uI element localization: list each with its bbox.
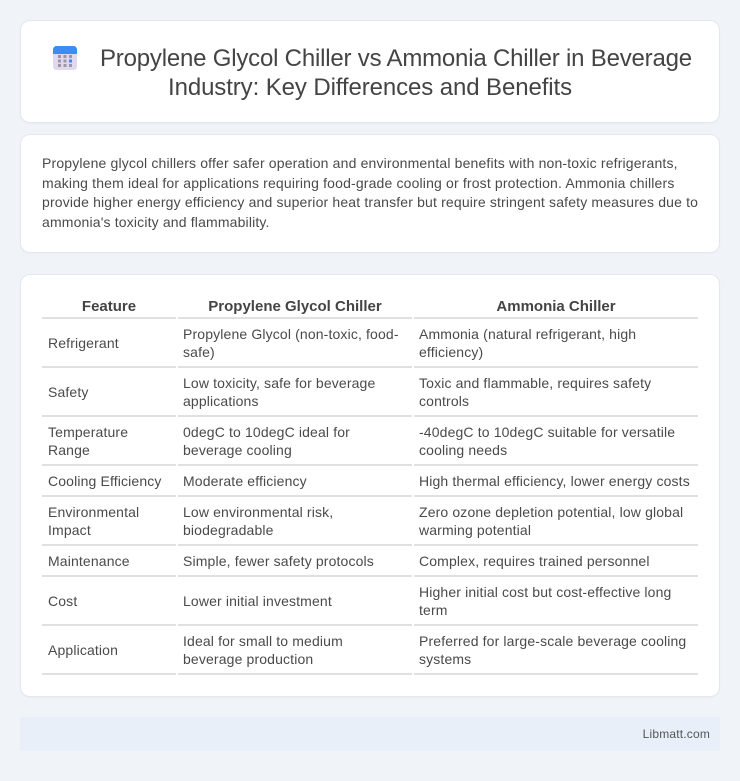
row: application: [42, 633, 698, 675]
table card: [20, 274, 720, 697]
row: refrigerant: efficiency): [419, 344, 483, 360]
row: safety: [42, 375, 698, 417]
intro text: provide higher energy efficiency and superior heat transfer but require stringent safety measures due to: [42, 194, 698, 210]
title: Industry: Key Differences and Benefits: [168, 74, 572, 101]
row: temperature range: Range: [48, 442, 90, 458]
row: maintenance: Simple, fewer safety protocols: [183, 553, 374, 569]
row: application: Application: [48, 642, 118, 658]
row: safety: Safety: [48, 384, 89, 400]
row: refrigerant: Ammonia (natural refrigerant, high: [419, 326, 636, 342]
row: application: Ideal for small to medium: [183, 633, 343, 649]
intro text: [42, 155, 698, 230]
row: cost: [42, 584, 698, 626]
intro text: ammonia's toxicity and flammability.: [42, 214, 270, 230]
row: cooling efficiency: [42, 473, 698, 497]
row: temperature range: beverage cooling: [183, 442, 292, 458]
row: maintenance: Complex, requires trained personnel: [419, 553, 650, 569]
footer bar: [20, 717, 720, 751]
row: safety: Low toxicity, safe for beverage: [183, 375, 375, 391]
row: environmental impact: Impact: [48, 522, 91, 538]
row: environmental impact: Environmental: [48, 504, 139, 520]
footer text: Libmatt.com: [643, 727, 710, 741]
row: cost: Cost: [48, 593, 77, 609]
table header: Ammonia Chiller: [496, 298, 616, 315]
table header: Propylene Glycol Chiller: [208, 298, 382, 315]
row: maintenance: Maintenance: [48, 553, 130, 569]
row: environmental impact: Zero ozone depletion potential, low global: [419, 504, 683, 520]
row: environmental impact: Low environmental risk,: [183, 504, 333, 520]
row: safety: Toxic and flammable, requires safety: [419, 375, 651, 391]
row: environmental impact: [42, 504, 698, 546]
row: safety: controls: [419, 393, 469, 409]
row: environmental impact: warming potential: [419, 522, 531, 538]
row: cost: term: [419, 602, 448, 618]
row: temperature range: Temperature: [48, 424, 128, 440]
title: [100, 45, 692, 101]
row: temperature range: 0degC to 10degC ideal for: [183, 424, 350, 440]
row: temperature range: [42, 424, 698, 466]
header card: [20, 20, 720, 123]
row: maintenance: [42, 553, 698, 577]
row: refrigerant: Refrigerant: [48, 335, 119, 351]
row: environmental impact: biodegradable: [183, 522, 274, 538]
intro text: Propylene glycol chillers offer safer operation and environmental benefits with non-toxic refrigerants,: [42, 155, 678, 171]
intro card: [20, 134, 720, 253]
title: Propylene Glycol Chiller vs Ammonia Chiller in Beverage: [100, 45, 692, 72]
row: cooling efficiency: Moderate efficiency: [183, 473, 307, 489]
table header: [42, 298, 698, 319]
table header: Feature: [82, 298, 136, 315]
row: application: beverage production: [183, 651, 313, 667]
row: cooling efficiency: Cooling Efficiency: [48, 473, 162, 489]
intro text: making them ideal for applications requiring food-grade cooling or frost protection. Ammonia chillers: [42, 174, 674, 190]
row: temperature range: -40degC to 10degC suitable for versatile: [419, 424, 675, 440]
row: application: Preferred for large-scale beverage cooling: [419, 633, 686, 649]
icon: calendar: [53, 46, 77, 70]
row: refrigerant: [42, 326, 698, 368]
row: safety: applications: [183, 393, 259, 409]
row: temperature range: cooling needs: [419, 442, 507, 458]
row: cost: Higher initial cost but cost-effective long: [419, 584, 671, 600]
row: cost: Lower initial investment: [183, 593, 332, 609]
row: refrigerant: safe): [183, 344, 215, 360]
row: application: systems: [419, 651, 471, 667]
row: refrigerant: Propylene Glycol (non-toxic, food-: [183, 326, 399, 342]
table: [42, 298, 698, 675]
row: cooling efficiency: High thermal efficiency, lower energy costs: [419, 473, 690, 489]
